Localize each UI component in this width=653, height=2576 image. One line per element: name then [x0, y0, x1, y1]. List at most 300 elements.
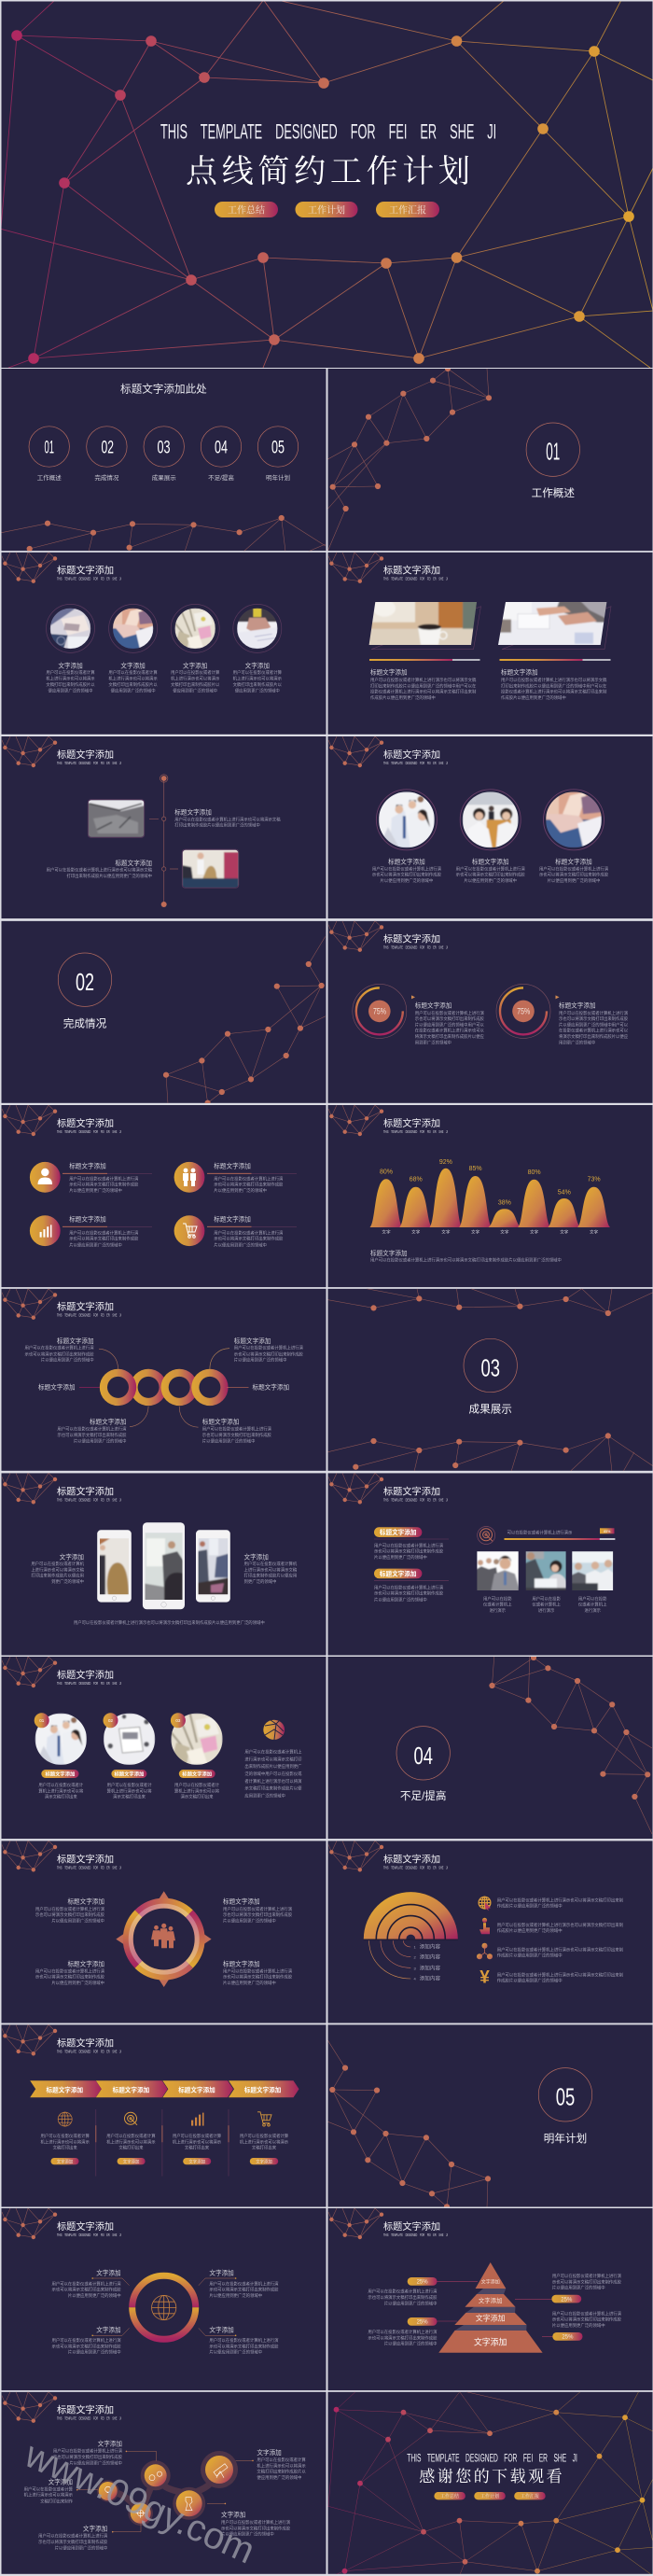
captions: 演示文稿打印出来: [181, 1794, 214, 1800]
captions: 机上进行演示也可以将演示: [108, 675, 158, 681]
watermark: www.09gy.com: [18, 2434, 260, 2572]
text blocks: 打印出来制作成胶片以便应用到更广泛的领域中用户可以在: [501, 682, 607, 689]
photo: coffee: [367, 600, 481, 650]
step text: 文稿打印出来: [252, 2145, 277, 2151]
pyramid: 文字添加: [476, 2314, 506, 2323]
chart categories: 文字: [411, 1229, 421, 1236]
text blocks: 用户可以在投影仪或者计算机上进行演: [57, 1426, 127, 1433]
text blocks: 到更广泛的领域中: [51, 1578, 84, 1585]
captions: 用户可以在投影仪或者计: [174, 1782, 220, 1788]
text blocks: 用到更广泛的领域中: [415, 1039, 452, 1045]
text blocks: 用户可以在投影仪或者计算机上进行演: [38, 2533, 108, 2540]
text blocks: 用户可以在投影仪或者计算机上进行演: [209, 2280, 279, 2287]
captions: 片以便应用到更广泛的领域中: [464, 877, 517, 884]
heading: 标题文字添加: [57, 565, 114, 577]
text: left: 用户可以在投影仪或者计算机上进行演示也可以将演示文稿: [47, 867, 153, 874]
text blocks: 示也可以将演示文稿打印出来制作成胶: [221, 2525, 291, 2531]
text blocks: 文字添加: [83, 2525, 108, 2533]
note: 标题文字添加: [370, 1249, 408, 1257]
captions: 用户可以在投影仪或者计算机上进行演: [456, 865, 525, 872]
chart categories: [382, 1229, 599, 1236]
side text: 用户可以在投影仪或者计算机上: [244, 1748, 302, 1755]
captions: 便应用到更广泛的领域中: [111, 687, 156, 693]
captions: 标题文字添加: [555, 857, 592, 865]
closing pills: 工作总结: [440, 2493, 459, 2499]
step text: 用户可以在投影仪或者计算: [173, 2133, 222, 2139]
sub heading: THIS TEMPLATE DESIGNED FOR FEI ER SHE JI: [383, 1128, 448, 1134]
captions: 文字添加: [120, 662, 146, 670]
panel: linked rings: [2, 1289, 326, 1471]
text blocks: 投影仪或者计算机上进行演示也可以将演示文稿打印出来制: [501, 689, 607, 695]
photo captions: 用户可以在投影: [483, 1595, 512, 1602]
text blocks: 片以便应用到更广泛的领域中: [41, 1357, 94, 1364]
linked rings: [100, 1369, 229, 1406]
pill text: 片以便应用到更广泛的领域中: [374, 1596, 427, 1603]
photo captions: 用户可以在投影: [578, 1595, 607, 1602]
photo captions: 仪或者计算机上: [532, 1602, 561, 1608]
panel: chevrons: [2, 2024, 326, 2206]
heading: 标题文字添加: [57, 2404, 114, 2416]
photo: laptop meeting: [523, 1549, 568, 1592]
text blocks: 标题文字添加: [223, 1959, 260, 1967]
text blocks: 用户可以在投影仪或者计算机上进行演: [552, 2273, 622, 2279]
text blocks: 用户可以在投影仪或者计算机: [244, 1561, 298, 1567]
sub heading: THIS TEMPLATE DESIGNED FOR FEI ER SHE JI: [57, 760, 121, 765]
sub heading: THIS TEMPLATE DESIGNED FOR FEI ER SHE JI: [383, 576, 448, 581]
text blocks: 片以便应用到更广泛的领域中: [552, 2285, 605, 2291]
panel: two slanted photos: [328, 553, 653, 735]
phone centre: [143, 1522, 185, 1609]
step pills: 文字添加: [57, 2158, 73, 2164]
side text: 示文稿打印出来制作成胶片以便: [244, 1785, 302, 1792]
text blocks: 示也可以将演示文稿打印出来制作成胶: [202, 1432, 272, 1438]
text blocks: 机上进行演示也可以将演示: [24, 2492, 74, 2499]
captions: 演示文稿打印出来: [45, 1794, 77, 1800]
text blocks: 片以便应用到更广泛的领域中: [384, 2341, 437, 2347]
icon text: 作成胶片以便应用到更广泛的领域中: [497, 1902, 563, 1909]
step text: 用户可以在投影仪或者计算: [106, 2133, 156, 2139]
text blocks: 用户可以在投影仪或者计算机上进行演示也可以将演示文稿: [370, 677, 477, 683]
text blocks: 便应用到更广泛的领域中: [257, 2474, 301, 2481]
captions: 用户可以在投影仪或者计: [38, 1782, 84, 1788]
chart categories: 文字: [500, 1229, 509, 1236]
text blocks: 文字添加: [60, 1552, 84, 1561]
ring 75% left: [353, 984, 415, 1038]
side text: 进行演示也可以将演示文稿打印: [244, 1756, 301, 1762]
text blocks: 示也可以将演示文稿打印出来制作成胶: [24, 1351, 94, 1357]
chevron arrows: [30, 2080, 299, 2097]
text blocks: 示也可以将演示文稿打印出来制作成胶: [368, 2294, 438, 2301]
side text: 应用到更广泛的领域中: [244, 1793, 285, 1799]
text blocks: 文字添加: [98, 2440, 122, 2448]
text blocks: 片以便应用到更广泛的领域中: [214, 1187, 267, 1194]
captions: 用户可以在投影仪或者计算机上进行演: [539, 865, 609, 872]
text blocks: [24, 1337, 304, 1444]
text blocks: 示也可以将演示文稿打印出来制作成胶: [69, 1182, 139, 1188]
captions: 便应用到更广泛的领域中: [235, 687, 280, 693]
text blocks: 片以便应用到更广泛的领域中: [202, 1437, 255, 1444]
step text: 机上进行演示也可以将演示: [240, 2138, 289, 2145]
note: 用户可以在投影仪或者计算机上进行演示也可以将演示文稿打印出来制作成胶片以便应用到更广泛的领域中: [370, 1257, 562, 1264]
text blocks: 标题文字添加: [214, 1161, 251, 1169]
pill buttons: 工作计划: [308, 203, 345, 217]
captions: 机上进行演示也可以将演示: [233, 675, 283, 681]
pyramid pills: [408, 2277, 582, 2341]
chart values: 80%: [528, 1169, 541, 1176]
pill text: [374, 1542, 444, 1603]
text blocks: 用到更广泛的领域中: [559, 1039, 595, 1045]
text blocks: 示也可以将演示文稿打印出来制作成胶: [69, 1236, 139, 1242]
section label: 完成情况: [63, 1017, 107, 1030]
chart values: 85%: [469, 1166, 482, 1172]
icon: person: [30, 1162, 61, 1193]
photo: team thumbs up: [475, 1549, 521, 1592]
text blocks: 用户可以在投影仪或者计算机上进行演: [214, 1176, 284, 1183]
text blocks: 机上进行演示也可以将演示: [257, 2462, 306, 2469]
photo: presentation: [181, 848, 240, 889]
number circle: [464, 1338, 517, 1393]
round photos: [35, 1714, 223, 1765]
photo captions: [483, 1595, 607, 1614]
panel: blob diagram: [2, 2392, 326, 2574]
icon: target: [478, 1527, 495, 1544]
text blocks: 用户可以在投影仪或者计算机: [31, 1561, 85, 1567]
chart categories: 文字: [382, 1229, 391, 1236]
text blocks: 打印出来制作成胶片以便应用: [244, 1573, 297, 1579]
icon: globe: [152, 2295, 176, 2320]
text blocks: 用户可以在投影仪或者计算机上进行演: [221, 2519, 291, 2526]
step icons: [58, 2112, 271, 2126]
captions: 片以便应用到更广泛的领域中: [548, 877, 600, 884]
icon text: 用户可以在投影仪或者计算机上进行演示也可以将演示文稿打印出来制: [497, 1947, 624, 1953]
number circle: [58, 953, 112, 1006]
heading: 标题文字添加: [57, 1301, 114, 1313]
number circle: 02: [76, 968, 94, 996]
rainbow legend: 添加内容: [420, 1964, 440, 1971]
phone left: [97, 1530, 132, 1603]
badges: 02: [108, 1718, 113, 1723]
captions: 机上进行演示也可以将演示: [46, 675, 95, 681]
pyramid pills: 25%: [561, 2297, 573, 2303]
text blocks: 示也可以将演示文稿打印出来制作成胶: [552, 2317, 622, 2323]
section label: 成果展示: [469, 1403, 512, 1415]
pills: [374, 1527, 449, 1580]
pills: 标题文字添加: [380, 1528, 417, 1536]
step text: 用户可以在投影仪或者计算: [240, 2133, 289, 2139]
photo captions: 进行演示: [490, 1607, 507, 1614]
vertical timeline: [149, 775, 178, 907]
step pills: [50, 2158, 278, 2164]
icon: cart: [174, 1215, 204, 1246]
text blocks: 打印出来制作成胶片以便应用: [31, 1573, 84, 1579]
chevron labels: 标题文字添加: [178, 2086, 215, 2094]
text blocks: 标题文字添加: [38, 1383, 76, 1392]
text blocks: 片以便应用到更广泛的领域中: [51, 1917, 104, 1924]
text blocks: 示也可以将演示文稿打印出来制作成胶: [214, 1236, 284, 1242]
bell chart: [369, 1169, 610, 1227]
heading: 标题文字添加: [57, 2037, 114, 2049]
agenda circles: 05: [271, 439, 285, 458]
sub heading: THIS TEMPLATE DESIGNED FOR FEI ER SHE JI: [383, 1864, 448, 1870]
chart values: 73%: [588, 1177, 601, 1183]
text: right: 打印出来制作成胶片以便应用到更广泛的领域中: [174, 822, 260, 829]
text blocks: 文字添加: [96, 2326, 121, 2334]
panel: section 03: [328, 1289, 653, 1472]
text blocks: 示也可以将演示文稿打印出来制作成胶: [53, 2454, 123, 2460]
rainbow legend: 2: [414, 1955, 416, 1960]
text blocks: 示也可以将演示文稿打印出来制作成胶: [415, 1015, 485, 1022]
text: left: [47, 859, 153, 879]
network bottom: [2, 518, 326, 552]
agenda circles: 03: [157, 439, 170, 458]
panel: three photos with badges: [2, 1657, 326, 1839]
text blocks: 示也可以将演示文稿打印出来制作成胶: [209, 2343, 279, 2349]
text blocks: 用户可以在投影仪或者计算机上进行演: [202, 1426, 272, 1433]
side text: 出来制作成胶片以便应用到更广: [244, 1763, 302, 1770]
network top: [328, 1289, 653, 1313]
sub heading: THIS TEMPLATE DESIGNED FOR FEI ER SHE JI: [383, 1496, 448, 1503]
text blocks: [35, 1897, 293, 1986]
progress bar: 85%: [604, 1530, 611, 1533]
number circle: 01: [546, 438, 560, 466]
compass ring: [116, 1891, 212, 1987]
text blocks: 用户可以在投影仪或者计算机上进行演: [209, 2337, 279, 2344]
text blocks: 片以便应用到更广泛的领域中: [68, 2292, 121, 2299]
icon text: 用户可以在投影仪或者计算机上进行演示也可以将演示文稿打印出来制: [497, 1897, 624, 1903]
heading: 标题文字添加: [57, 2220, 114, 2233]
badges: 03: [175, 1718, 181, 1723]
text blocks: 示也可以将演示文稿打印出来制作成胶: [223, 1911, 293, 1918]
text blocks: 标题文字添加: [67, 1959, 104, 1967]
text blocks: 标题文字添加: [214, 1215, 251, 1224]
text blocks: 作成胶片以便应用到更广泛的领域中: [370, 694, 436, 701]
note: [370, 1249, 562, 1264]
globe ring: [132, 2275, 196, 2339]
chevron labels: 标题文字添加: [113, 2086, 150, 2094]
text blocks: 到更广泛的领域中: [244, 1578, 276, 1585]
rainbow chart: [364, 1892, 458, 1939]
icon text: 作成胶片以便应用到更广泛的领域中: [497, 1953, 563, 1959]
text blocks: 文字添加: [96, 2269, 121, 2277]
panel: globe ring: [2, 2208, 326, 2390]
progress bars: [369, 659, 610, 661]
chart categories: 文字: [441, 1229, 451, 1236]
panel: bell chart: [328, 1105, 653, 1287]
agenda labels: 成果展示: [152, 473, 176, 482]
text blocks: 示也可以将演示文稿打印出来制作成胶: [234, 1351, 304, 1357]
text blocks: 用户可以在投影仪或者计算机上进行演: [35, 1906, 105, 1912]
text blocks: 示也可以将演示文稿打印出来制作成胶: [209, 2287, 279, 2293]
text blocks: 片以便应用到更广泛的领域中: [552, 2322, 605, 2329]
blob icons: [105, 2464, 228, 2518]
captions: 用户可以在投影仪或者计算: [108, 669, 158, 676]
pill text: 示也可以将演示文稿打印出来制作成胶: [374, 1590, 444, 1597]
chart categories: 文字: [471, 1229, 480, 1236]
icon text: 用户可以在投影仪或者计算机上进行演示也可以将演示文稿打印出来制: [497, 1922, 624, 1928]
dividers: [63, 1173, 297, 1226]
text blocks: 片以便应用到更广泛的领域中: [209, 2292, 262, 2299]
captions: 文稿打印出来制作成胶片以: [171, 681, 220, 688]
blob cluster: [97, 2451, 238, 2526]
number circle: 04: [414, 1742, 433, 1770]
heading: 标题文字添加: [383, 2220, 440, 2233]
text blocks: 用户可以在投影仪或者计算机上进行演: [69, 1176, 139, 1183]
text: right: 标题文字添加: [174, 807, 212, 816]
photo captions: 进行演示: [584, 1607, 602, 1614]
text blocks: 用户可以在投影仪或者计算机上进行演: [53, 2448, 123, 2455]
heading: 标题文字添加: [383, 1853, 440, 1865]
text blocks: 示也可以将演示文稿打印出来制作成胶: [223, 1974, 293, 1981]
closing template line: THIS TEMPLATE DESIGNED FOR FEI ER SHE JI: [407, 2451, 577, 2464]
text blocks: 文字添加: [209, 2269, 234, 2277]
captions: 算机上进行演示也可以将: [174, 1787, 220, 1794]
captions: 算机上进行演示也可以将: [38, 1787, 84, 1794]
text blocks: 标题文字添加: [501, 668, 538, 677]
section label: 不足/提高: [400, 1789, 447, 1802]
heading: 标题文字添加: [57, 1117, 114, 1129]
step text: 文稿打印出来: [185, 2145, 210, 2151]
number circle: [396, 1727, 450, 1780]
text: right: [174, 808, 280, 827]
text blocks: 用户可以在投影仪或者计算机上进行演: [415, 1010, 485, 1016]
text blocks: 标题文字添加: [415, 1001, 452, 1010]
text blocks: 用户可以在投影仪或者计算机上进行演: [368, 2289, 438, 2295]
text blocks: 片以便应用到更广泛的领域中: [68, 2349, 121, 2356]
text blocks: 在投影仪或者计算机上进行演示也可以: [415, 1028, 485, 1034]
text blocks: 标题文字添加: [67, 1897, 104, 1906]
pyramid pills: 25%: [562, 2335, 574, 2341]
icon: globe cursor: [479, 1897, 491, 1911]
ring 75% left: 75%: [373, 1007, 386, 1016]
agenda labels: 不足/提高: [208, 473, 234, 482]
pill text: 示也可以将演示文稿打印出来制作成胶: [374, 1548, 444, 1555]
agenda circles: 04: [215, 439, 228, 458]
step text: 机上进行演示也可以将演示: [106, 2138, 156, 2145]
rainbow legend: 添加内容: [420, 1943, 440, 1951]
text blocks: 示也可以将演示文稿打印出来制作成胶: [368, 2334, 438, 2341]
separators: [96, 2109, 229, 2177]
text blocks: 片以便应用到更广泛的领域中: [74, 1437, 127, 1444]
side text: 泛的领域中用户可以在投影仪或: [244, 1771, 302, 1777]
text blocks: 打印出来制作成胶片以便应用到更广泛的领域中用户可以在: [370, 682, 477, 689]
step text: 机上进行演示也可以将演示: [173, 2138, 222, 2145]
text: left: 打印出来制作成胶片以便应用到更广泛的领域中: [66, 873, 152, 879]
captions: [38, 1782, 220, 1800]
network: [493, 1657, 652, 1834]
round photos: [376, 790, 604, 850]
text blocks: 片以便应用到更广泛的领域中: [214, 1241, 267, 1248]
ring 75% right: 75%: [517, 1007, 530, 1016]
sub heading: THIS TEMPLATE DESIGNED FOR FEI ER SHE JI: [57, 576, 121, 581]
captions: 用户可以在投影仪或者计算机上进行演: [372, 865, 442, 872]
captions: 示也可以将演示文稿打印出来制作成胶: [456, 872, 525, 878]
text blocks: 片以便应用到更广泛的领域中: [69, 1241, 122, 1248]
sub heading: THIS TEMPLATE DESIGNED FOR FEI ER SHE JI: [57, 1680, 121, 1686]
panel: rainbow: [328, 1841, 653, 2023]
text blocks: 片以便应用到更广泛的领域中: [209, 2349, 262, 2356]
captions: 片以便应用到更广泛的领域中: [381, 877, 433, 884]
icon: bars: [30, 1215, 61, 1246]
text blocks: 文稿打印出来制作: [40, 2498, 74, 2504]
pill text: 用户可以在投影仪或者计算机上进行演: [374, 1542, 444, 1548]
panel: phones: [2, 1473, 326, 1656]
badges: [35, 1713, 186, 1728]
text blocks: 示也可以将演示文稿打印出来制作成胶: [35, 1911, 105, 1918]
step text: 机上进行演示也可以将演示: [41, 2138, 90, 2145]
pills: 标题文字添加: [182, 1771, 212, 1778]
icon: two people: [174, 1162, 204, 1193]
text blocks: 用户可以在投影仪或者计算机上进行演: [368, 2329, 438, 2335]
text blocks: 用户可以在投影仪或者计算机上进行演: [552, 2310, 622, 2317]
captions: 用户可以在投影仪或者计算: [171, 669, 220, 676]
text blocks: [24, 2440, 306, 2551]
number circle: [526, 423, 580, 476]
sub heading: THIS TEMPLATE DESIGNED FOR FEI ER SHE JI: [383, 945, 448, 950]
text blocks: [31, 1552, 298, 1626]
leader lines: [92, 2278, 236, 2335]
number circle: 03: [481, 1353, 500, 1381]
chevron labels: 标题文字添加: [47, 2086, 83, 2094]
text blocks: 用户可以在投影仪或者计算: [257, 2457, 306, 2463]
heading: 标题文字添加: [383, 749, 440, 761]
text blocks: 标题文字添加: [370, 668, 408, 677]
agenda labels: 完成情况: [94, 473, 119, 482]
rainbow legend: 添加内容: [420, 1953, 440, 1961]
captions: [372, 857, 609, 884]
text blocks: 文字添加: [244, 1552, 269, 1561]
rainbow legend: 3: [414, 1966, 416, 1970]
text blocks: [51, 2269, 279, 2356]
text blocks: 标题文字添加: [90, 1418, 127, 1426]
text blocks: 片以便应用到更广泛的领域中: [234, 1357, 286, 1364]
panel: progress rings: [328, 921, 653, 1103]
round photos: [47, 604, 282, 652]
network: [166, 936, 326, 1104]
step pills: 文字添加: [188, 2158, 205, 2164]
captions: 示也可以将演示文稿打印出来制作成胶: [372, 872, 442, 878]
text blocks: 片以便应用到更广泛的领域中: [55, 2544, 107, 2551]
heading: 标题文字添加: [383, 565, 440, 577]
agenda circles: 01: [45, 439, 54, 458]
rainbow legend: 添加内容: [420, 1975, 440, 1982]
pyramid pills: 25%: [417, 2280, 428, 2286]
subtitle: template line: THIS TEMPLATE DESIGNED FOR FEI ER SHE JI: [160, 120, 496, 143]
text blocks: 示也可以将演示文稿打印出来制作成胶: [214, 1182, 284, 1188]
step pills: 文字添加: [123, 2158, 139, 2164]
text blocks: 标题文字添加: [559, 1001, 596, 1010]
icon: people: [151, 1924, 175, 1948]
number circle: 05: [556, 2083, 575, 2111]
number circle: [538, 2068, 592, 2121]
captions: 文字添加: [183, 662, 208, 670]
chart categories: 文字: [590, 1229, 599, 1236]
text blocks: 片以便应用到更广泛的领域中: [69, 2460, 122, 2467]
text blocks: 片以便应用到更广泛的领域中: [69, 1187, 122, 1194]
panel: pyramid: [328, 2208, 653, 2390]
chart values: 38%: [498, 1199, 511, 1206]
captions: 文稿打印出来制作成胶片以: [46, 681, 95, 688]
text blocks: 示也可以将演示文稿打印出来制作成胶: [35, 1974, 105, 1981]
panel: agenda: [2, 369, 326, 552]
photo captions: 仪或者计算机上: [578, 1602, 607, 1608]
panel: pills and team photos: [328, 1473, 653, 1656]
connectors: [79, 1349, 248, 1427]
side text: 者计算机上进行演示也可以将演: [244, 1778, 302, 1785]
captions: 文稿打印出来制作成胶片以: [233, 681, 283, 688]
text blocks: 文字添加: [49, 2478, 73, 2486]
icon: network: [477, 1943, 493, 1959]
text blocks: 示也可以将演示文稿打印出来制作成胶: [51, 2343, 121, 2349]
